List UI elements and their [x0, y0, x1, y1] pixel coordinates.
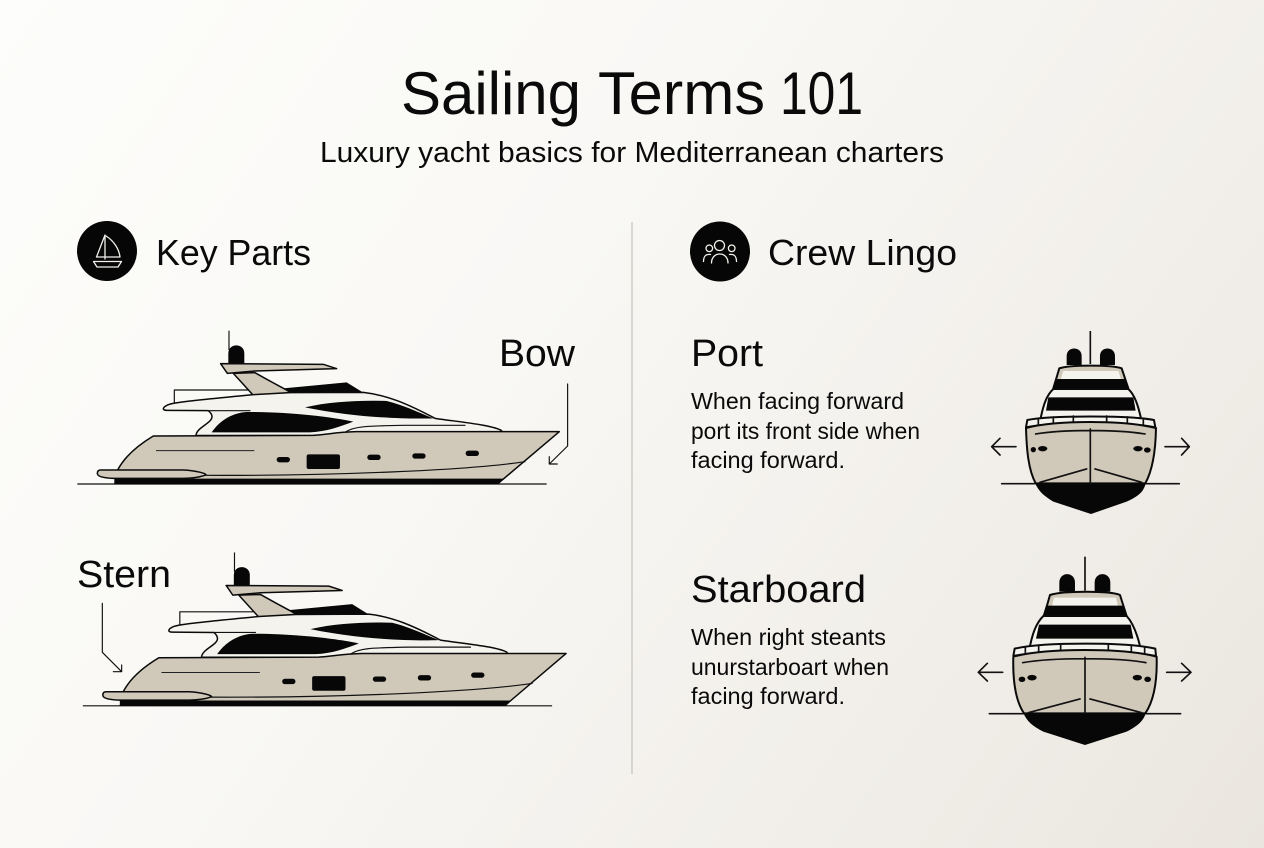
arrow: bow pointer: [549, 384, 568, 464]
title: 101: [780, 60, 863, 127]
icon: sailboat badge: [77, 221, 137, 281]
yacht front view: port: [992, 331, 1189, 514]
yacht side view: stern: [83, 552, 566, 706]
panel: crew lingo: [690, 222, 1191, 745]
text: starboard description: unurstarboart when: [691, 654, 889, 680]
icon: crew badge: [690, 222, 750, 282]
text: port description: When facing forward: [691, 388, 904, 414]
title: Terms: [598, 60, 765, 127]
text: port description: [691, 388, 920, 473]
panel: key parts: [77, 221, 576, 706]
text: port description: port its front side when: [691, 418, 920, 444]
text: starboard description: [691, 624, 889, 709]
heading: starboard: Starboard: [691, 569, 866, 611]
yacht side view: bow: [77, 331, 559, 484]
subtitle: Luxury yacht basics for Mediterranean charters: [320, 137, 944, 169]
text: starboard description: When right steants: [691, 624, 886, 650]
heading: key parts: Key Parts: [156, 232, 311, 273]
heading: port: Port: [691, 333, 763, 375]
label: stern: Stern: [77, 554, 171, 596]
text: port description: facing forward.: [691, 447, 845, 473]
yacht front view: starboard: [978, 557, 1191, 745]
arrow: stern pointer: [102, 603, 122, 672]
text: starboard description: facing forward.: [691, 683, 845, 709]
label: bow: Bow: [499, 333, 576, 375]
title: Sailing: [401, 60, 581, 127]
heading: crew lingo: Crew Lingo: [768, 232, 957, 273]
